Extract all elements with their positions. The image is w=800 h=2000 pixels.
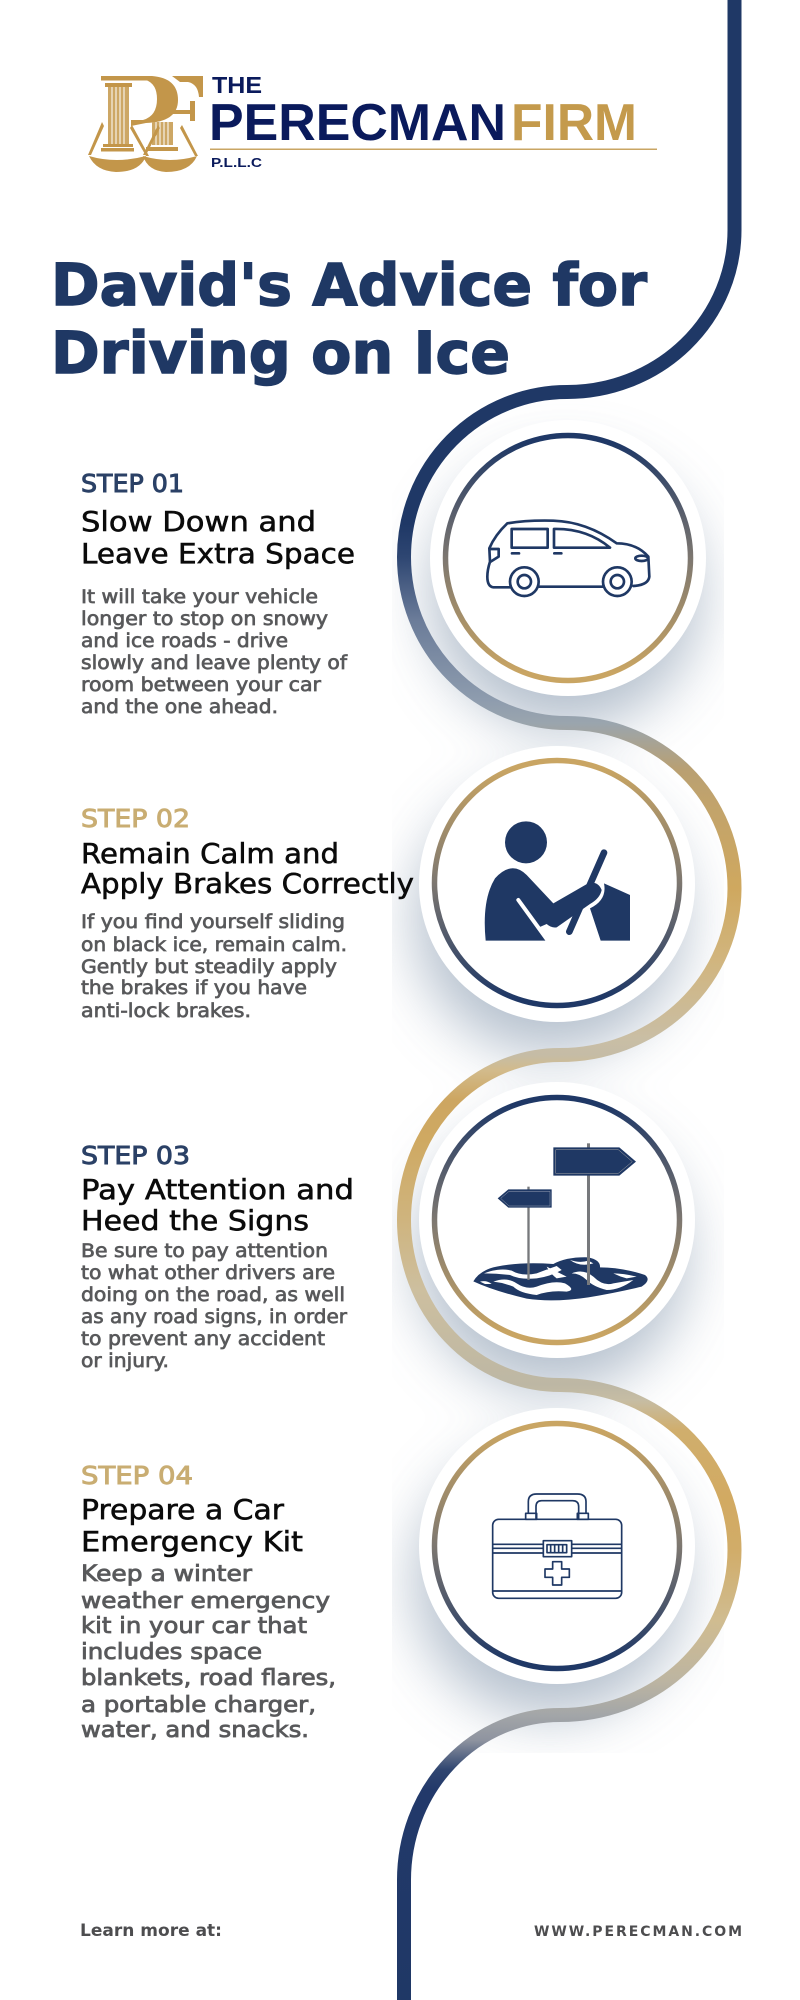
heading step 03: Pay Attention and (81, 1174, 354, 1206)
body step 03: as any road signs, in order (81, 1307, 347, 1328)
step 01 circle (430, 420, 706, 696)
body step 03: doing on the road, as well (81, 1285, 345, 1306)
step 02 circle (419, 746, 695, 1022)
step label 01: STEP 01 (81, 469, 184, 498)
pillar one (101, 76, 149, 80)
body step 01: and ice roads - drive (81, 631, 288, 652)
body step 03: Be sure to pay attention (81, 1241, 328, 1262)
body step 02: Gently but steadily apply (81, 957, 337, 978)
title: Driving on Ice (51, 319, 510, 387)
body step 02: If you find yourself sliding (81, 912, 345, 933)
icon: driver at steering wheel (485, 821, 630, 941)
P bowl (131, 76, 178, 126)
logo wordmark PLLC: P.L.L.C (211, 155, 263, 170)
step label 03: STEP 03 (81, 1141, 190, 1170)
body step 02 (81, 912, 347, 1022)
footer: website: WWW.PERECMAN.COM (534, 1924, 742, 1940)
body step 04: a portable charger, (81, 1693, 316, 1718)
body step 03: or injury. (81, 1351, 169, 1372)
icon: emergency kit (493, 1494, 622, 1598)
heading step 02: Apply Brakes Correctly (81, 868, 414, 900)
logo wordmark FIRM: FIRM (511, 94, 637, 152)
body step 04: weather emergency (81, 1589, 330, 1614)
icon: car (487, 521, 649, 596)
heading step 01 (81, 506, 355, 570)
panel: step 04 text (81, 1461, 336, 1743)
ice patch (473, 1257, 648, 1300)
body step 01: slowly and leave plenty of (81, 653, 348, 674)
title: David's Advice for (51, 251, 647, 319)
tall sign (553, 1143, 636, 1285)
body step 04: Keep a winter (81, 1562, 253, 1587)
footer: learn more: Learn more at: (80, 1921, 222, 1941)
body step 01 (81, 587, 348, 718)
heading step 01: Leave Extra Space (81, 538, 355, 570)
body step 04: water, and snacks. (81, 1718, 309, 1743)
body step 02: on black ice, remain calm. (81, 935, 347, 956)
heading step 04: Emergency Kit (81, 1526, 303, 1558)
heading step 04: Prepare a Car (81, 1494, 285, 1526)
panel: step 02 text (81, 804, 414, 1022)
logo wordmark PERECMAN: PERECMAN (209, 94, 506, 152)
body step 01: room between your car (81, 675, 321, 696)
step label 02: STEP 02 (81, 804, 190, 833)
heading step 02: Remain Calm and (81, 838, 339, 870)
step 04 circle (419, 1408, 695, 1684)
body step 01: and the one ahead. (81, 697, 278, 718)
title (51, 251, 647, 387)
F top (172, 76, 203, 97)
heading step 03 (81, 1174, 354, 1237)
step 03 circle (419, 1082, 695, 1358)
body step 02: the brakes if you have (81, 978, 307, 999)
body step 04: kit in your car that (81, 1614, 307, 1639)
logo mark: pillars, PF monogram and scales (88, 76, 203, 172)
scale bowls (89, 156, 146, 172)
panel: step 03 text (81, 1141, 354, 1372)
icon: road signs on ice (473, 1143, 648, 1300)
winding gradient road line (404, 0, 734, 2000)
step label 04: STEP 04 (81, 1461, 193, 1490)
body step 03: to what other drivers are (81, 1263, 335, 1284)
body step 03: to prevent any accident (81, 1329, 325, 1350)
short sign (498, 1187, 552, 1280)
heading step 02 (81, 838, 414, 900)
heading step 03: Heed the Signs (81, 1205, 309, 1237)
body step 01: It will take your vehicle (81, 587, 318, 608)
body step 04: includes space (81, 1640, 262, 1665)
circle drop shadows (415, 459, 700, 1717)
body step 04 (81, 1562, 336, 1743)
logo: The Perecman Firm (88, 72, 657, 172)
pillar two (152, 122, 173, 145)
heading step 01: Slow Down and (81, 506, 316, 538)
panel: step 01 text (81, 469, 355, 718)
heading step 04 (81, 1494, 303, 1558)
body step 01: longer to stop on snowy (81, 609, 328, 630)
logo wordmark THE: THE (212, 72, 262, 98)
body step 02: anti-lock brakes. (81, 1001, 251, 1022)
body step 03 (81, 1241, 347, 1372)
body step 04: blankets, road flares, (81, 1666, 336, 1691)
